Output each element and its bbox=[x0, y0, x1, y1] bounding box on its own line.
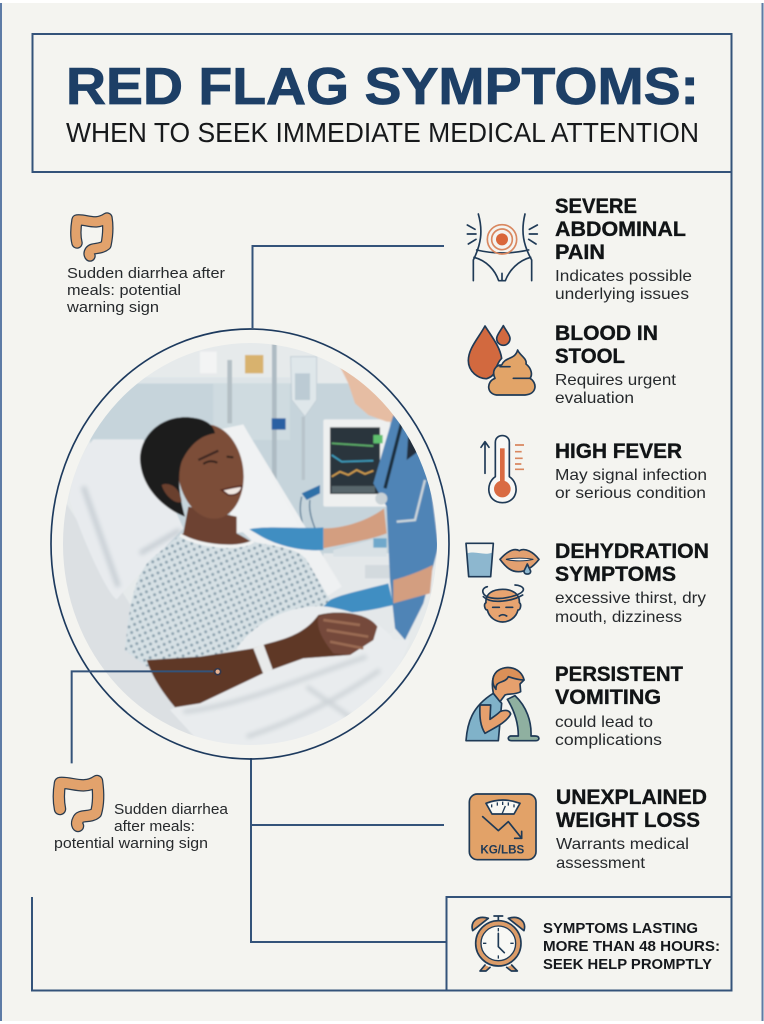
label: STOOL bbox=[555, 345, 625, 368]
callout text: SYMPTOMS LASTING bbox=[543, 921, 698, 937]
label: Indicates possible bbox=[555, 268, 692, 285]
label: DEHYDRATION bbox=[555, 540, 709, 563]
patient arm and hands bbox=[147, 612, 377, 707]
nurse bbox=[249, 363, 438, 640]
note text: potential warning sign bbox=[54, 835, 208, 852]
label: PERSISTENT bbox=[555, 663, 683, 686]
subtitle: WHEN TO SEEK IMMEDIATE MEDICAL ATTENTION bbox=[66, 117, 699, 148]
label: Requires urgent bbox=[555, 372, 677, 389]
note text: warning sign bbox=[66, 299, 159, 316]
frame and connector lines bbox=[32, 172, 732, 990]
label: SEVERE bbox=[555, 195, 637, 218]
label: Warrants medical bbox=[556, 836, 689, 853]
left note: bottom bbox=[54, 781, 232, 852]
monitor bbox=[323, 419, 390, 507]
label: UNEXPLAINED bbox=[556, 786, 707, 809]
label: BLOOD IN bbox=[555, 322, 658, 345]
title: RED FLAG SYMPTOMS: bbox=[66, 58, 699, 116]
callout text: MORE THAN 48 HOURS: bbox=[543, 939, 720, 955]
callout line and dot bbox=[72, 669, 221, 763]
icon: alarm clock bbox=[472, 916, 525, 971]
label: or serious condition bbox=[555, 485, 706, 502]
label: assessment bbox=[556, 855, 646, 872]
icon: abdomen bbox=[467, 214, 537, 281]
icon: weighing scale: KG/LBS bbox=[480, 842, 524, 856]
note text: Sudden diarrhea after bbox=[67, 265, 225, 282]
label: May signal infection bbox=[555, 467, 707, 484]
label: PAIN bbox=[555, 241, 605, 264]
back pillow bbox=[222, 424, 244, 534]
title panel bbox=[32, 34, 732, 172]
label: VOMITING bbox=[555, 686, 661, 709]
bed bbox=[63, 506, 192, 734]
label: evaluation bbox=[555, 390, 634, 407]
patient head bbox=[140, 417, 253, 548]
label: underlying issues bbox=[555, 286, 689, 303]
wristband bbox=[253, 644, 273, 674]
bedside cabinet bbox=[323, 538, 390, 578]
label: SYMPTOMS bbox=[555, 563, 676, 586]
pillow bbox=[70, 439, 183, 599]
icon: person vomiting bbox=[466, 668, 539, 741]
callout text: SEEK HELP PROMPTLY bbox=[543, 957, 712, 973]
icon: thermometer bbox=[481, 436, 524, 503]
photo: hospital scene bbox=[60, 340, 440, 750]
icon: water glass, lips, dizzy head bbox=[466, 543, 539, 622]
symptom: dehydration bbox=[466, 540, 713, 626]
note text: Sudden diarrhea bbox=[114, 801, 229, 818]
symptom: severe abdominal pain bbox=[467, 195, 696, 303]
symptom: unexplained weight loss bbox=[469, 786, 711, 872]
label: mouth, dizziness bbox=[555, 609, 682, 626]
symptom: blood in stool bbox=[468, 322, 680, 407]
patient photo medallion bbox=[51, 329, 449, 763]
icon: colon bbox=[76, 218, 108, 256]
label: HIGH FEVER bbox=[555, 440, 682, 463]
symptom: persistent vomiting bbox=[466, 663, 687, 749]
icon: blood drops and stool bbox=[468, 326, 535, 395]
label: could lead to bbox=[555, 714, 653, 731]
left note: top bbox=[66, 218, 229, 316]
icon: weighing scale bbox=[469, 794, 536, 860]
label: WEIGHT LOSS bbox=[556, 809, 700, 832]
blanket bbox=[171, 605, 352, 741]
symptom: high fever bbox=[481, 436, 711, 503]
note text: meals: potential bbox=[67, 282, 181, 299]
label: complications bbox=[555, 732, 662, 749]
callout panel: 48 hours bbox=[446, 897, 732, 990]
icon: colon bbox=[59, 781, 98, 826]
medallion ring bbox=[51, 329, 449, 759]
label: excessive thirst, dry bbox=[555, 590, 706, 607]
patient gown bbox=[125, 535, 330, 667]
note text: after meals: bbox=[114, 818, 195, 835]
label: ABDOMINAL bbox=[555, 218, 686, 241]
